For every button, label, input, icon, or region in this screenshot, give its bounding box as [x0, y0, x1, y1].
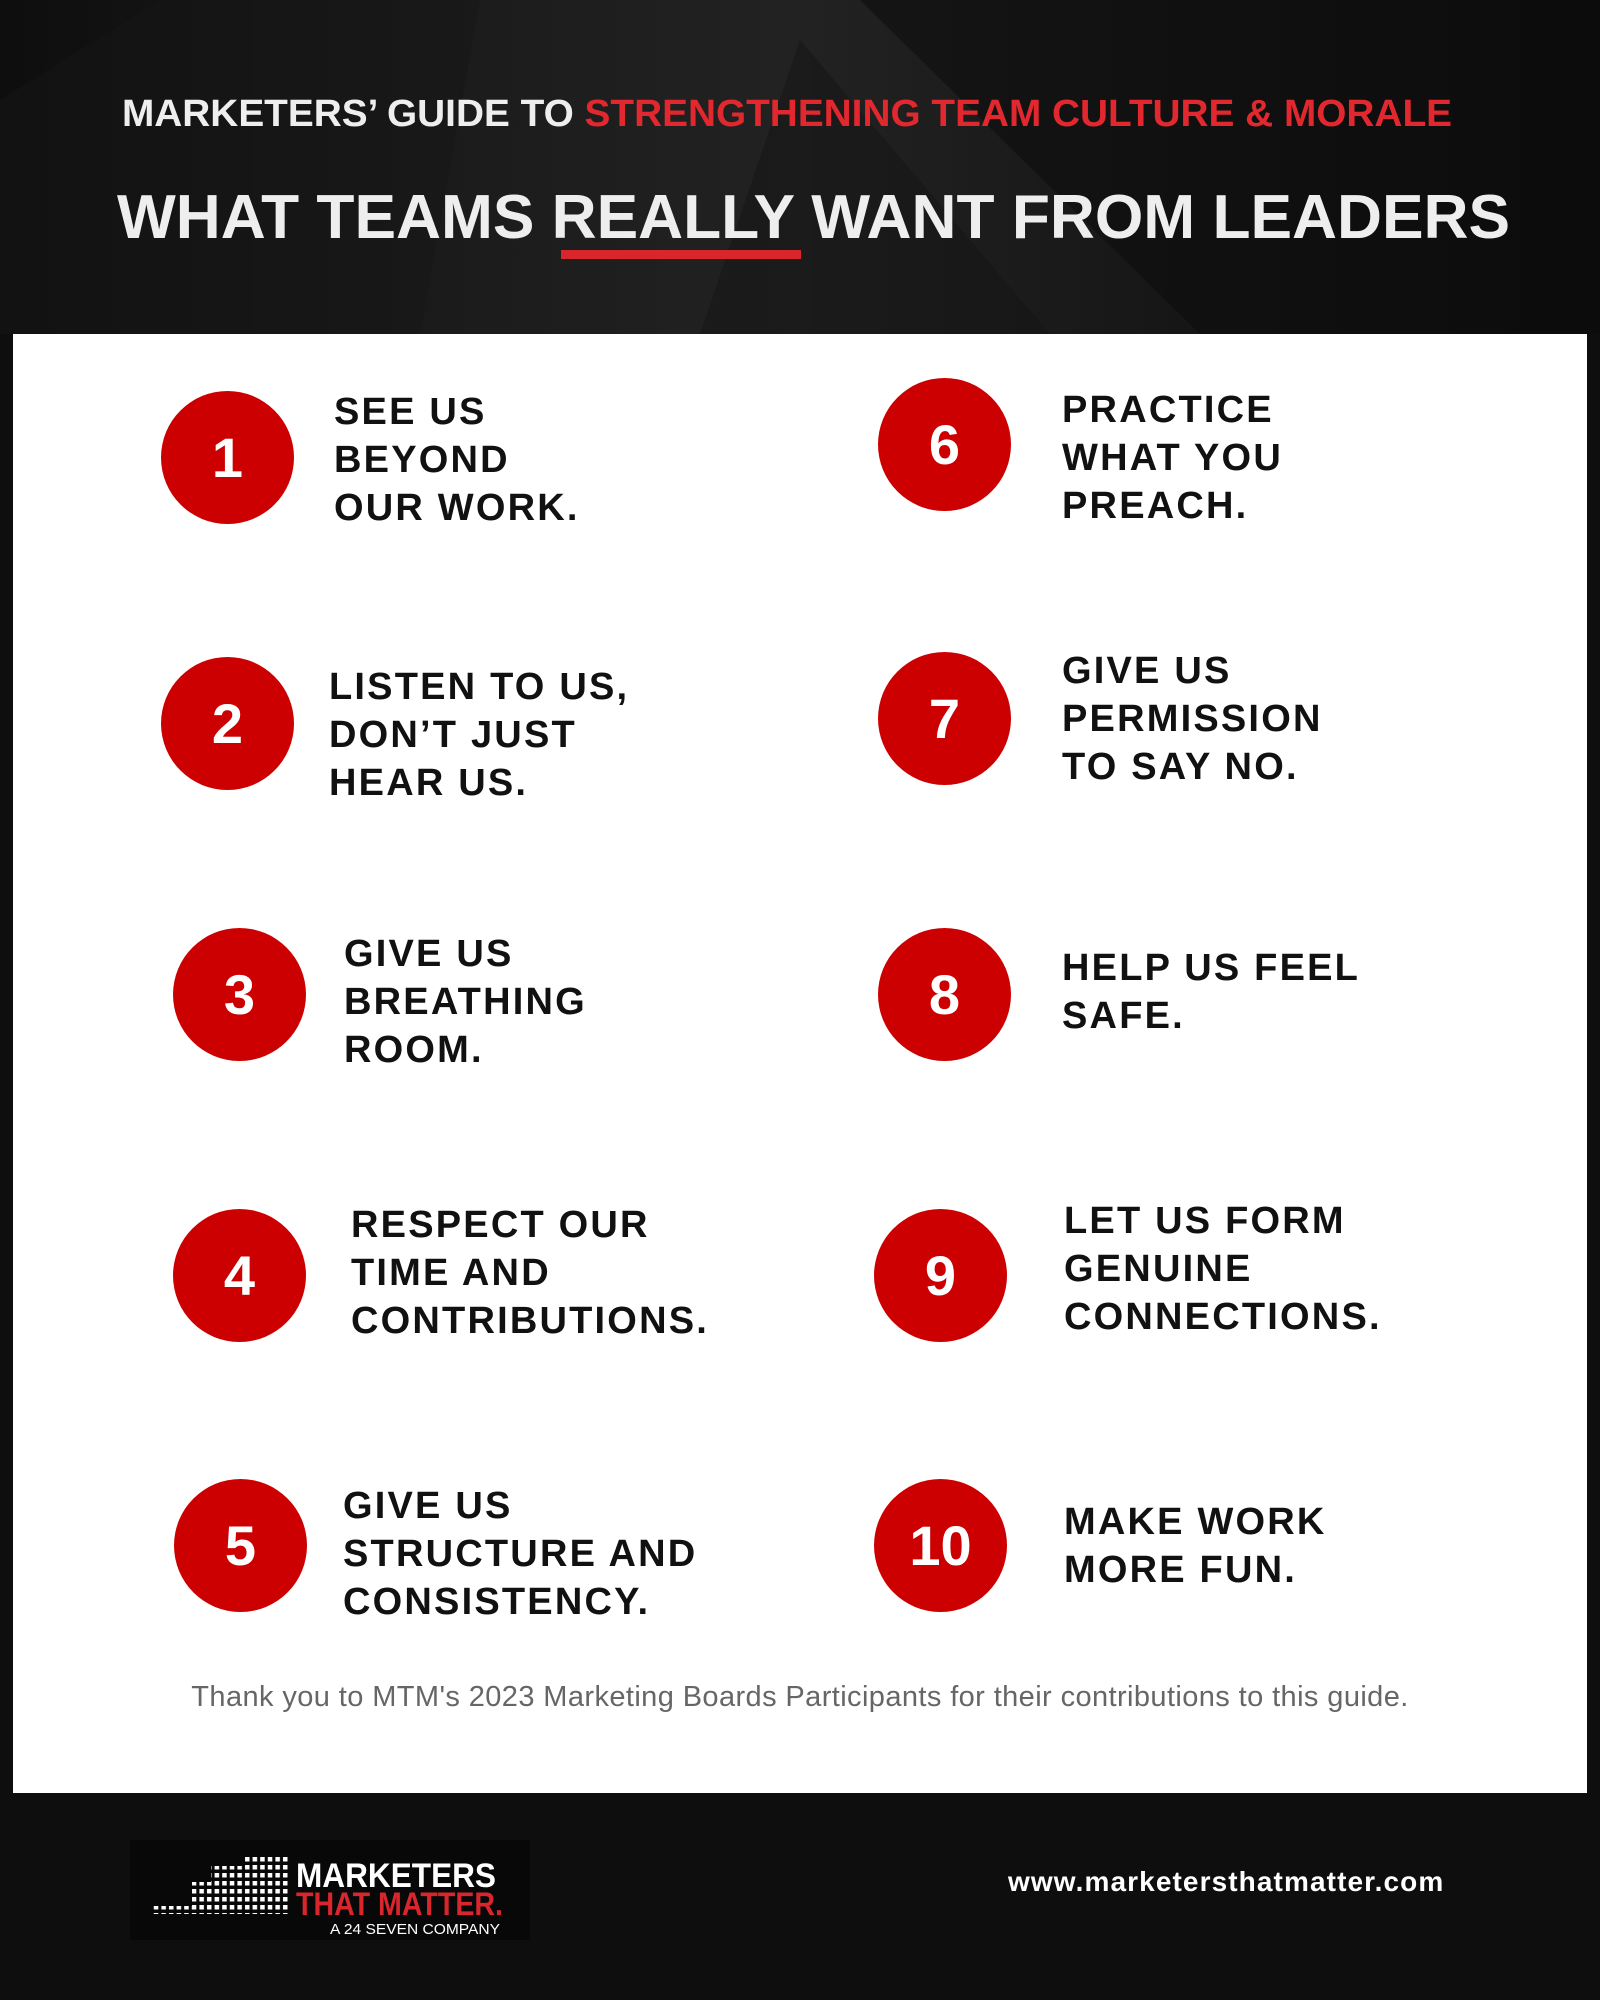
logo wordmark: MARKETERS — [296, 1857, 496, 1895]
text: PERMISSION — [1062, 698, 1323, 740]
text: 8 — [929, 963, 960, 1026]
text: GIVE US — [343, 1485, 513, 1527]
text: RESPECT OUR — [351, 1204, 650, 1246]
item 8 — [878, 928, 1360, 1061]
item 1 — [161, 391, 580, 529]
item 3 — [173, 928, 587, 1071]
item 5 — [174, 1479, 697, 1623]
text: TO SAY NO. — [1062, 746, 1299, 788]
text: 7 — [929, 687, 960, 750]
text: MORE FUN. — [1064, 1549, 1297, 1591]
text: PREACH. — [1062, 485, 1248, 527]
text: STRUCTURE AND — [343, 1533, 697, 1575]
text: CONTRIBUTIONS. — [351, 1300, 709, 1342]
text: DON’T JUST — [329, 714, 577, 756]
text: SAFE. — [1062, 995, 1185, 1037]
text: LISTEN TO US, — [329, 666, 629, 708]
logo dots — [152, 1857, 290, 1914]
text: 1 — [212, 426, 243, 489]
text: PRACTICE — [1062, 389, 1274, 431]
header background — [0, 0, 1600, 334]
text: 9 — [925, 1244, 956, 1307]
text: GIVE US — [344, 933, 514, 975]
title underline — [561, 250, 801, 259]
text: 6 — [929, 413, 960, 476]
text: 2 — [212, 692, 243, 755]
text: OUR WORK. — [334, 487, 580, 529]
text: BREATHING — [344, 981, 587, 1023]
text: 5 — [225, 1514, 256, 1577]
subtitle: MARKETERS’ GUIDE TO STRENGTHENING TEAM CULTURE & MORALE — [122, 93, 1452, 135]
text: 10 — [909, 1514, 972, 1577]
text: WHAT YOU — [1062, 437, 1283, 479]
item 9 — [874, 1200, 1382, 1342]
text: HELP US FEEL — [1062, 947, 1360, 989]
text: SEE US — [334, 391, 487, 433]
text: ROOM. — [344, 1029, 484, 1071]
website url: www.marketersthatmatter.com — [1008, 1866, 1444, 1897]
text: LET US FORM — [1064, 1200, 1346, 1242]
item 7 — [878, 650, 1323, 788]
text: GENUINE — [1064, 1248, 1253, 1290]
text: BEYOND — [334, 439, 510, 481]
text: MAKE WORK — [1064, 1501, 1327, 1543]
text: CONSISTENCY. — [343, 1581, 650, 1623]
item 10 — [874, 1479, 1327, 1612]
footer logo: A 24 SEVEN COMPANY — [330, 1921, 500, 1938]
item 4 — [173, 1204, 709, 1342]
footer logo — [154, 1857, 503, 1938]
item 6 — [878, 378, 1283, 527]
header text — [117, 93, 1510, 259]
footer logo: THAT MATTER. — [296, 1886, 503, 1922]
text: TIME AND — [351, 1252, 551, 1294]
text: 4 — [224, 1244, 255, 1307]
main white panel — [13, 334, 1587, 1793]
text: CONNECTIONS. — [1064, 1296, 1382, 1338]
title: WHAT TEAMS REALLY WANT FROM LEADERS — [117, 183, 1510, 252]
text: 3 — [224, 963, 255, 1026]
item 2 — [161, 657, 629, 804]
thanks note: Thank you to MTM's 2023 Marketing Boards Participants for their contributions to this guide. — [191, 1681, 1409, 1713]
text: GIVE US — [1062, 650, 1232, 692]
text: HEAR US. — [329, 762, 528, 804]
